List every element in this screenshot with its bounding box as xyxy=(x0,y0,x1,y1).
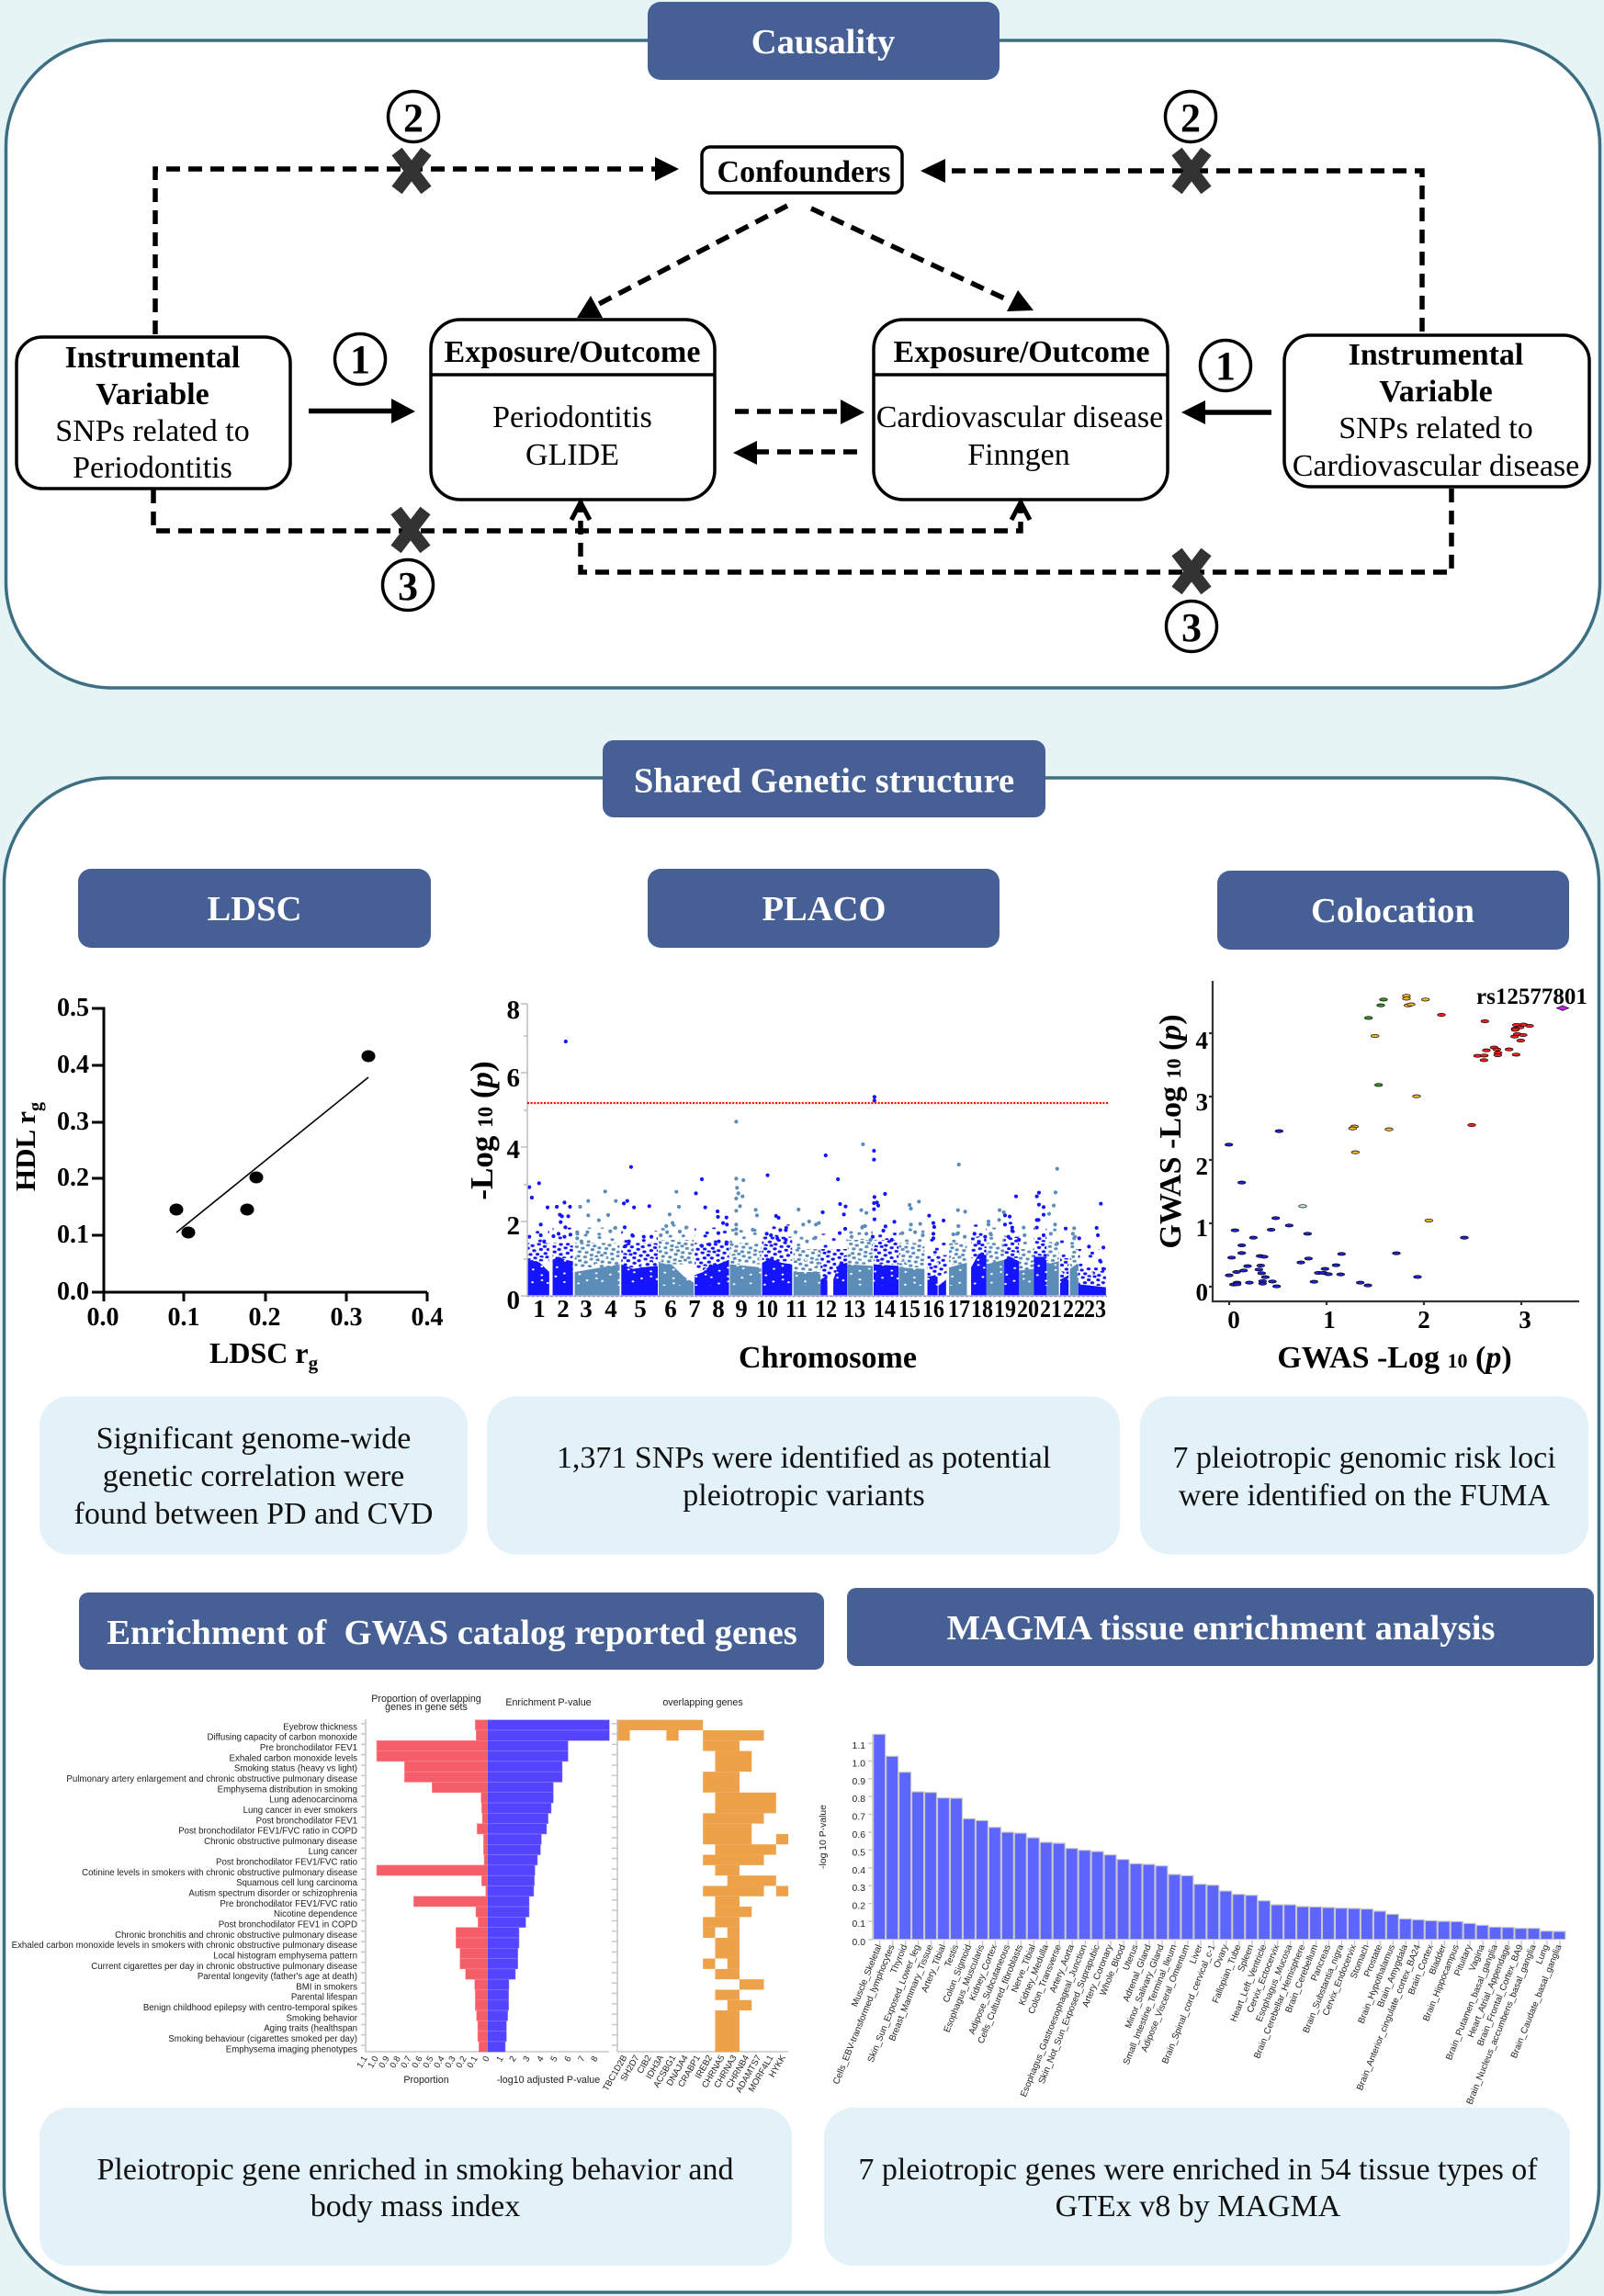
chart: PLACO Manhattan plot xyxy=(464,996,1108,1375)
tissue labels: Artery_Coronary xyxy=(1080,1943,1115,2009)
box: right instrumental variable xyxy=(1284,335,1589,487)
axis tick labels: ADAMTS7 xyxy=(734,2054,763,2095)
bars: enrichment p-value xyxy=(488,1720,609,2052)
axis tick labels: 0 xyxy=(480,2054,492,2064)
tissue labels: Brain_Frontal_Cortex_BA9 xyxy=(1475,1943,1526,2048)
text box: GWAS catalog finding: Pleiotropic gene enriched in smoking behavior and xyxy=(96,2153,734,2187)
number: 1 right: 1 xyxy=(1215,343,1236,388)
gene set labels: Smoking behavior xyxy=(286,2013,358,2023)
chart: LDSC scatter: HDL r xyxy=(9,1111,41,1191)
tissue labels: Uterus xyxy=(1122,1943,1141,1972)
axis tick labels: 0.6 xyxy=(410,2054,425,2070)
chart: PLACO Manhattan plot: 7 xyxy=(688,1295,701,1322)
chart: colocation scatter xyxy=(1154,981,1587,1375)
tissue labels: Heart_Atrial_Appendage xyxy=(1466,1943,1513,2039)
panel background: causality xyxy=(6,40,1600,688)
number: 1 left xyxy=(334,334,386,384)
chart: PLACO Manhattan plot: 11 xyxy=(785,1295,808,1322)
tissue labels: Brain_Cerebellum xyxy=(1283,1943,1320,2014)
tissue labels: Heart_Left_Ventricle xyxy=(1229,1943,1270,2023)
bars xyxy=(874,1734,1565,1940)
y axis: 0.9 xyxy=(853,1777,865,1787)
arrow: periodontitis to cardiovascular disease xyxy=(735,400,864,424)
box: left instrumental variable: SNPs related to xyxy=(55,414,250,448)
tissue labels: Minor_Salivary_Gland xyxy=(1124,1943,1167,2030)
tissue labels: Prostate xyxy=(1362,1943,1384,1978)
number: 3 right: 3 xyxy=(1181,605,1202,650)
tissue labels: Pituitary xyxy=(1452,1943,1474,1977)
gene set labels: Emphysema distribution in smoking xyxy=(218,1784,357,1795)
y axis: 0.3 xyxy=(853,1884,865,1894)
axis tick labels: 0.4 xyxy=(432,2054,447,2070)
gene set labels: Exhaled carbon monoxide levels xyxy=(230,1753,357,1763)
box: left instrumental variable: Variable xyxy=(96,377,209,411)
chart: colocation scatter: 0 xyxy=(1196,1278,1208,1306)
axis tick labels: HYKK xyxy=(767,2053,788,2079)
chart: PLACO Manhattan plot: 16 xyxy=(922,1295,944,1322)
tissue labels: Artery_Aorta xyxy=(1048,1943,1077,1995)
chart: colocation scatter: GWAS -Log 10 (p) xyxy=(1277,1341,1512,1375)
heading: LDSC xyxy=(78,869,431,948)
heading: MAGMA tissue enrichment analysis xyxy=(847,1588,1594,1666)
gene set labels: Aging traits (healthspan xyxy=(264,2024,357,2034)
tissue labels: Brain_Hippocampus xyxy=(1421,1943,1462,2023)
axis tick labels: CHRNA5 xyxy=(700,2054,727,2090)
text box: PLACO finding: pleiotropic variants xyxy=(683,1479,925,1513)
heading: Colocation xyxy=(1217,871,1569,950)
chart: PLACO Manhattan plot: 20 xyxy=(1017,1295,1039,1322)
axis tick labels: CRABP1 xyxy=(676,2054,703,2089)
text box: Colocation finding: 7 pleiotropic genomic risk loci xyxy=(1172,1441,1556,1475)
tissue labels: Bladder xyxy=(1428,1942,1449,1976)
y axis: -log 10 P-value xyxy=(819,1805,829,1869)
panel: shared genetic structure xyxy=(4,740,1598,2292)
chart: PLACO Manhattan plot: 9 xyxy=(735,1295,748,1322)
text box: LDSC finding: genetic correlation were xyxy=(103,1459,404,1493)
number: 3 left xyxy=(382,560,434,610)
chart: LDSC scatter: g xyxy=(26,1102,46,1111)
tissue labels: Thyroid xyxy=(889,1943,909,1975)
arrow: confounders to cardiovascular disease xyxy=(811,208,1034,311)
chart: PLACO Manhattan plot: 3 xyxy=(580,1295,593,1322)
tissue labels: Artery_Tibial xyxy=(920,1943,948,1994)
bars: proportion xyxy=(377,1720,488,2052)
chart: PLACO Manhattan plot: 2 xyxy=(507,1211,520,1241)
number: 2 left xyxy=(388,92,439,141)
axis tick labels: 1.0 xyxy=(366,2054,381,2070)
box: exposure outcome cardiovascular disease xyxy=(874,320,1168,500)
chart: PLACO Manhattan plot: 5 xyxy=(634,1295,647,1322)
gene set labels: BMI in smokers xyxy=(296,1982,357,1992)
axis tick labels: CIB2 xyxy=(636,2054,654,2076)
box: exposure outcome periodontitis: Exposure/Outcome xyxy=(445,335,700,369)
chart: PLACO Manhattan plot: 4 xyxy=(604,1295,617,1322)
number: 2 right: 2 xyxy=(1180,96,1201,141)
tissue labels: Brain_Nucleus_accumbens_basal_ganglia xyxy=(1465,1943,1539,2106)
chart: LDSC scatter: 0.0 xyxy=(86,1303,119,1332)
chart: LDSC scatter: 0.1 xyxy=(167,1303,200,1332)
gene set labels: Cotinine levels in smokers with chronic obstructive pulmonary disease xyxy=(82,1868,357,1878)
text box: PLACO finding: 1,371 SNPs were identified as potential xyxy=(557,1441,1051,1475)
box: left instrumental variable: Instrumental xyxy=(65,341,240,375)
gene set labels: Lung cancer in ever smokers xyxy=(243,1806,357,1816)
axis tick labels: 0.7 xyxy=(399,2054,414,2070)
chart: PLACO Manhattan plot: Chromosome xyxy=(739,1341,917,1375)
tissue labels: Muscle_Skeletal xyxy=(850,1943,884,2009)
panel: causality xyxy=(6,2,1600,688)
tissue labels: Brain_Putamen_basal_ganglia xyxy=(1444,1943,1500,2062)
chart: PLACO Manhattan plot: 15 xyxy=(898,1295,921,1322)
axes xyxy=(364,1719,788,2052)
tissue labels: Brain_Cerebellar_Hemisphere xyxy=(1252,1943,1307,2060)
box: right instrumental variable: SNPs related to xyxy=(1339,411,1533,445)
baseline ticks xyxy=(879,1941,1566,1946)
chart: PLACO Manhattan plot: 4 xyxy=(507,1135,520,1165)
heatmap: overlapping genes xyxy=(617,1720,788,2052)
axis tick labels: IDH3A xyxy=(644,2053,666,2081)
icon: cross top right xyxy=(1177,152,1206,190)
text box: LDSC finding: Significant genome-wide xyxy=(96,1422,411,1456)
text box: Colocation finding xyxy=(1140,1396,1588,1554)
text box: Colocation finding: were identified on the FUMA xyxy=(1179,1479,1551,1513)
tissue labels: Vagina xyxy=(1467,1943,1487,1973)
arrow: right IV to periodontitis xyxy=(571,489,1452,572)
chart: PLACO Manhattan plot: 18 xyxy=(971,1295,993,1322)
gene set labels: Benign childhood epilepsy with centro-temporal spikes xyxy=(143,2003,357,2013)
chart: PLACO Manhattan plot: 23 xyxy=(1084,1295,1106,1322)
gene set labels: Emphysema imaging phenotypes xyxy=(226,2044,357,2054)
axis tick labels: 5 xyxy=(548,2054,560,2064)
chart: LDSC scatter: 0.5 xyxy=(57,994,89,1022)
chart: PLACO Manhattan plot: 14 xyxy=(874,1295,896,1322)
tissue labels: Pancreas xyxy=(1309,1943,1333,1983)
tissue labels: Esophagus_Gastroesophageal_Junction xyxy=(1019,1943,1090,2099)
tissue labels: Brain_Amygdala xyxy=(1376,1943,1410,2009)
tissue labels: Brain_Cortex xyxy=(1406,1943,1436,1997)
tissue labels: Cervix_Ectocervix xyxy=(1246,1943,1282,2014)
tissue labels: Whole_Blood xyxy=(1099,1943,1128,1998)
text box: MAGMA finding: 7 pleiotropic genes were enriched in 54 tissue types of xyxy=(858,2153,1538,2187)
tissue labels: Testis xyxy=(943,1943,961,1969)
axis tick labels: 0.2 xyxy=(454,2054,469,2070)
heading: PLACO: PLACO xyxy=(762,890,887,929)
axis tick labels: MORF4L1 xyxy=(747,2054,775,2094)
gene set labels: Chronic obstructive pulmonary disease xyxy=(204,1837,357,1847)
tissue labels: Skin_Sun_Exposed_Lower_leg xyxy=(866,1943,922,2064)
number: 3 right xyxy=(1167,601,1216,652)
gene set labels: Local histogram emphysema pattern xyxy=(213,1951,357,1961)
axis tick labels: 0.5 xyxy=(421,2054,436,2070)
chart: colocation scatter: 1 xyxy=(1323,1306,1336,1334)
text box: LDSC finding: found between PD and CVD xyxy=(74,1497,433,1531)
y axis: 0.1 xyxy=(853,1919,865,1930)
chart: LDSC scatter: 0.2 xyxy=(57,1164,89,1192)
gene set labels: Post bronchodilator FEV1 in COPD xyxy=(219,1919,357,1930)
axis tick labels: 0.9 xyxy=(377,2054,392,2070)
heading: MAGMA tissue enrichment analysis: MAGMA tissue enrichment analysis xyxy=(947,1609,1495,1648)
text box: PLACO finding xyxy=(487,1396,1120,1554)
tissue labels: Spleen xyxy=(1237,1943,1256,1974)
column headers: Proportion xyxy=(403,2075,449,2086)
gene set labels: Smoking status (heavy vs light) xyxy=(234,1764,357,1774)
box: Confounders: Confounders xyxy=(717,155,890,189)
tissue labels: Brain_Substantia_nigra xyxy=(1302,1943,1346,2034)
arrow: left IV to cardiovascular disease xyxy=(153,490,1030,531)
y axis: 0.0 xyxy=(853,1938,865,1948)
column headers: Enrichment P-value xyxy=(505,1697,592,1708)
axis tick labels: 8 xyxy=(589,2054,601,2064)
chart: LDSC scatter: 0.4 xyxy=(412,1303,443,1332)
number: 2 left: 2 xyxy=(403,96,424,141)
column headers: Proportion of overlapping xyxy=(371,1694,481,1705)
tissue labels: Cells_Cultured_fibroblasts xyxy=(977,1943,1025,2045)
chart: LDSC scatter: g xyxy=(309,1352,319,1374)
chart: PLACO Manhattan plot: 12 xyxy=(815,1295,837,1322)
arrow: left IV to exposure xyxy=(309,399,415,423)
chart: colocation scatter: 2 xyxy=(1196,1153,1208,1180)
text box: LDSC finding xyxy=(40,1396,468,1554)
heading: Colocation: Colocation xyxy=(1311,892,1474,930)
tissue labels: Lung xyxy=(1534,1943,1552,1965)
axis tick labels: 0.1 xyxy=(465,2054,480,2070)
chart: colocation scatter: 1 xyxy=(1196,1214,1208,1242)
y axis: 1.1 xyxy=(853,1741,865,1751)
tissue labels: Colon_Sigmoid xyxy=(942,1943,974,2004)
tissue labels: Adipose_Subcutaneous xyxy=(967,1943,1012,2036)
axis tick labels: 4 xyxy=(535,2054,547,2064)
box: exposure outcome cardiovascular disease: Cardiovascular disease xyxy=(876,400,1163,434)
chart: PLACO Manhattan plot: 19 xyxy=(994,1295,1016,1322)
column headers: overlapping genes xyxy=(662,1697,743,1708)
tissue labels: Liver xyxy=(1188,1942,1205,1965)
box: right instrumental variable: Instrumental xyxy=(1349,338,1523,372)
tissue labels: Brain_Spinal_cord_cervical_c-1 xyxy=(1160,1943,1218,2065)
chart: colocation scatter: 3 xyxy=(1519,1306,1531,1334)
chart: colocation scatter: GWAS -Log 10 (p) xyxy=(1154,1014,1188,1249)
chart: LDSC scatter xyxy=(9,994,443,1374)
box: Confounders xyxy=(702,147,902,193)
gene set labels: Parental longevity (father's age at death) xyxy=(198,1972,357,1982)
axis tick labels: IREB2 xyxy=(694,2054,715,2081)
chart: PLACO Manhattan plot: 22 xyxy=(1063,1295,1085,1322)
tissue labels: Stomach xyxy=(1349,1943,1372,1980)
gene set labels: Diffusing capacity of carbon monoxide xyxy=(207,1733,357,1743)
heading: Causality: Causality xyxy=(751,23,895,62)
chart: PLACO Manhattan plot: 6 xyxy=(507,1064,520,1093)
axis tick labels: 7 xyxy=(576,2054,588,2064)
tissue labels xyxy=(831,1942,1564,2106)
box: exposure outcome cardiovascular disease: Exposure/Outcome xyxy=(894,335,1149,369)
gene set labels: Chronic bronchitis and chronic obstructive pulmonary disease xyxy=(115,1930,357,1941)
axis tick labels: 1.1 xyxy=(355,2054,370,2070)
box: exposure outcome cardiovascular disease: Finngen xyxy=(967,438,1070,472)
chart: LDSC scatter: 0.3 xyxy=(331,1303,362,1332)
tissue labels: Skin_Not_Sun_Exposed_Suprapubic xyxy=(1037,1943,1102,2086)
axis tick labels: CHRNA3 xyxy=(712,2054,740,2090)
y axis: 0.5 xyxy=(853,1848,865,1858)
chart: LDSC scatter: 0.4 xyxy=(57,1051,89,1079)
axis tick labels: SH2D7 xyxy=(619,2054,642,2083)
chart: PLACO Manhattan plot: 10 xyxy=(756,1295,778,1322)
chart: colocation scatter: 2 xyxy=(1418,1306,1430,1334)
axis tick labels: 0.3 xyxy=(443,2054,458,2070)
y axis: 0.6 xyxy=(853,1830,865,1840)
y axis: 1.0 xyxy=(853,1759,865,1769)
gene set labels: Parental lifespan xyxy=(291,1993,357,2003)
arrow: confounders to periodontitis xyxy=(577,206,787,318)
gene set labels: Lung adenocarcinoma xyxy=(269,1795,358,1806)
column headers: genes in gene sets xyxy=(385,1702,468,1713)
gene set labels: Smoking behaviour (cigarettes smoked per day) xyxy=(168,2034,357,2044)
tissue labels: Ovary xyxy=(1212,1943,1231,1970)
text box: MAGMA finding xyxy=(824,2108,1570,2266)
box: left instrumental variable: Periodontitis xyxy=(73,451,232,485)
icon: cross bottom left xyxy=(396,511,425,549)
gene set labels: Pulmonary artery enlargement and chronic obstructive pulmonary disease xyxy=(66,1774,357,1784)
gene set labels: Pre bronchodilator FEV1 xyxy=(260,1743,357,1753)
arrow: cardiovascular disease to periodontitis xyxy=(733,441,857,465)
tissue labels: Cervix_Endocervix xyxy=(1321,1943,1359,2017)
gene set labels: Nicotine dependence xyxy=(274,1909,357,1919)
tissue labels: Fallopian_Tube xyxy=(1211,1943,1244,2005)
chart: PLACO Manhattan plot: 8 xyxy=(507,996,520,1025)
box: exposure outcome periodontitis xyxy=(431,320,715,500)
axis tick labels: 2 xyxy=(507,2054,519,2064)
text box: GWAS catalog finding: body mass index xyxy=(311,2189,520,2223)
axis tick labels: TBC1D2B xyxy=(601,2054,629,2093)
panel background: shared genetic structure xyxy=(4,778,1598,2292)
tissue labels: Brain_Anterior_cingulate_cortex_BA24 xyxy=(1355,1943,1423,2092)
axis tick labels: 0.8 xyxy=(388,2054,403,2070)
chart: colocation scatter: 0 xyxy=(1227,1306,1240,1334)
chart: LDSC scatter: LDSC r xyxy=(209,1336,309,1369)
chart: PLACO Manhattan plot: -Log 10 (p) xyxy=(464,1061,500,1200)
tissue labels: Nerve_Tibial xyxy=(1010,1943,1038,1994)
number: 1 right xyxy=(1200,340,1251,391)
chart: PLACO Manhattan plot: 21 xyxy=(1040,1295,1062,1322)
text box: GWAS catalog finding xyxy=(40,2108,792,2266)
chart: colocation scatter: rs12577801 xyxy=(1476,985,1587,1009)
chart: colocation scatter: 3 xyxy=(1196,1088,1208,1116)
tissue labels: Brain_Caudate_basal_ganglia xyxy=(1509,1943,1564,2060)
chart: PLACO Manhattan plot: 8 xyxy=(712,1295,725,1322)
box: exposure outcome periodontitis: GLIDE xyxy=(525,438,619,472)
icon: cross bottom right xyxy=(1177,552,1206,591)
gene set labels: Pre bronchodilator FEV1/FVC ratio xyxy=(220,1899,357,1909)
y axis: 0.4 xyxy=(853,1866,865,1876)
gene set labels: Post bronchodilator FEV1/FVC ratio in COPD xyxy=(178,1827,357,1837)
chart: LDSC scatter: 0.2 xyxy=(248,1303,281,1332)
tissue labels: Kidney_Medulla xyxy=(1017,1943,1051,2007)
heading: Causality xyxy=(648,2,1000,80)
axis tick labels: ACSBG1 xyxy=(651,2054,678,2089)
gene set labels: Post bronchodilator FEV1 xyxy=(256,1816,357,1826)
chart: PLACO Manhattan plot: 0 xyxy=(507,1286,520,1315)
box: right instrumental variable: Cardiovascular disease xyxy=(1293,449,1579,483)
number: 2 right xyxy=(1165,92,1216,141)
chart: PLACO Manhattan plot: 17 xyxy=(948,1295,970,1322)
tissue labels: Cells_EBV-transformed_lymphocytes xyxy=(831,1943,897,2086)
axis tick labels: 3 xyxy=(521,2054,533,2064)
box: right instrumental variable: Variable xyxy=(1379,375,1493,409)
heading: Enrichment of GWAS catalog reported genes xyxy=(79,1593,824,1670)
gene set labels: Autism spectrum disorder or schizophrenia xyxy=(188,1888,358,1899)
icon: cross top left xyxy=(397,152,426,190)
number: 3 left: 3 xyxy=(398,564,418,609)
chart: PLACO Manhattan plot: 6 xyxy=(664,1295,677,1322)
column headers xyxy=(371,1694,743,2086)
axis tick labels: 6 xyxy=(562,2054,574,2064)
chart: LDSC scatter: 0.1 xyxy=(57,1221,89,1249)
tissue labels: Esophagus_Muscularis xyxy=(943,1943,987,2034)
tissue labels: Breast_Mammary_Tissue xyxy=(887,1943,935,2043)
y axis: 0.8 xyxy=(853,1795,865,1805)
axis tick labels: CHRNB4 xyxy=(725,2053,751,2090)
y axis: 0.2 xyxy=(853,1902,865,1912)
axis tick labels xyxy=(355,2053,788,2095)
chart: LDSC scatter: 0.0 xyxy=(57,1277,89,1306)
tissue labels: Esophagus_Mucosa xyxy=(1255,1943,1294,2023)
chart: colocation scatter: 4 xyxy=(1196,1027,1208,1054)
text box: MAGMA finding: GTEx v8 by MAGMA xyxy=(1056,2189,1341,2223)
axis tick labels: DNAJA4 xyxy=(665,2053,691,2088)
chart: PLACO Manhattan plot: 2 xyxy=(557,1295,570,1322)
arrow: right IV to confounders xyxy=(921,159,1422,332)
y axis xyxy=(819,1734,873,1948)
arrow: right IV to exposure xyxy=(1181,400,1271,424)
chart: PLACO Manhattan plot: 1 xyxy=(533,1295,546,1322)
tissue labels: Adipose_Visceral_Omentum xyxy=(1140,1943,1192,2054)
heading: Enrichment of GWAS catalog reported genes: Enrichment of GWAS catalog reported genes xyxy=(107,1614,797,1652)
heading: PLACO xyxy=(648,869,1000,948)
gene set labels xyxy=(12,1722,358,2054)
gene set labels: Post bronchodilator FEV1/FVC ratio xyxy=(216,1858,357,1868)
gene set labels: Squamous cell lung carcinoma xyxy=(236,1878,358,1888)
tissue labels: Small_Intestine_Terminal_Ileum xyxy=(1122,1943,1180,2066)
tissue labels: Brain_Hypothalamus xyxy=(1357,1943,1397,2025)
tissue labels: Adrenal_Gland xyxy=(1122,1943,1154,2003)
heading: LDSC: LDSC xyxy=(208,890,301,929)
heading: Shared Genetic structure xyxy=(603,740,1045,817)
gene set labels: Lung cancer xyxy=(309,1847,358,1857)
axis tick labels: 1 xyxy=(494,2054,506,2064)
chart: PLACO Manhattan plot: 13 xyxy=(843,1295,865,1322)
heading: Shared Genetic structure: Shared Genetic structure xyxy=(634,762,1014,801)
gene set labels: Exhaled carbon monoxide levels in smokers with chronic obstructive pulmonary disease xyxy=(12,1941,357,1951)
box: exposure outcome periodontitis: Periodontitis xyxy=(492,400,652,434)
chart: GWAS catalog enrichment xyxy=(12,1694,788,2095)
chart: MAGMA tissue enrichment xyxy=(819,1734,1566,2106)
gene set labels: Eyebrow thickness xyxy=(283,1722,357,1732)
chart: LDSC scatter: 0.3 xyxy=(57,1108,89,1136)
number: 1 left: 1 xyxy=(350,337,370,382)
tissue labels: Kidney_Cortex xyxy=(968,1943,1000,2002)
y axis: 0.7 xyxy=(853,1813,865,1823)
gene set labels: Current cigarettes per day in chronic obstructive pulmonary disease xyxy=(91,1962,357,1972)
box: left instrumental variable xyxy=(17,337,290,489)
tissue labels: Colon_Transverse xyxy=(1027,1943,1064,2016)
column headers: -log10 adjusted P-value xyxy=(497,2075,600,2086)
arrow: left IV to confounders xyxy=(155,157,679,334)
